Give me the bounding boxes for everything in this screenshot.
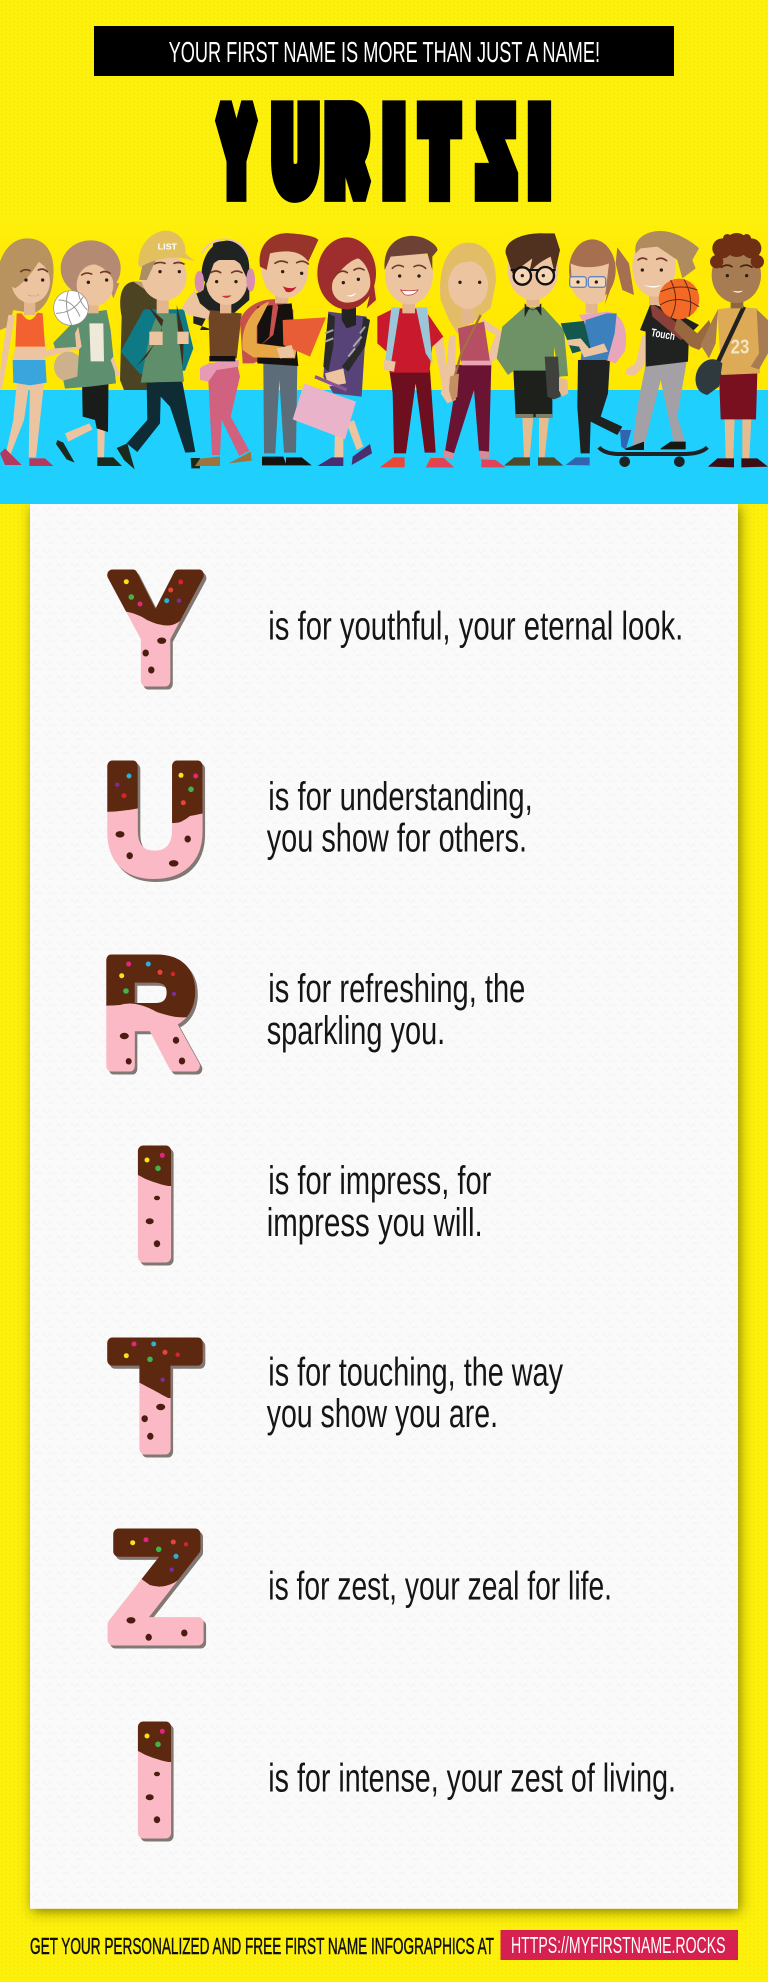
text: T lines: is for touching, the way bbox=[268, 1351, 563, 1395]
letter T icon: T bbox=[111, 1310, 199, 1482]
title: name: Z bbox=[480, 91, 513, 213]
student 11: boy on skateboard with basketball: Touch bbox=[650, 327, 676, 343]
letter R icon: R bbox=[102, 928, 198, 1099]
row: letter U bbox=[107, 760, 530, 882]
text: T lines bbox=[267, 1351, 563, 1436]
letter T icon: T bbox=[111, 1310, 199, 1482]
student 9: boy in glasses with green sweater bbox=[497, 233, 568, 466]
student 10: girl with tablet and pink backpack bbox=[561, 239, 634, 465]
letter Z icon bbox=[108, 1528, 206, 1648]
letter I icon: I bbox=[136, 1697, 178, 1869]
letter I icon: I bbox=[133, 1694, 176, 1866]
letter I icon bbox=[138, 1722, 174, 1842]
student 1: girl in orange top bbox=[0, 238, 79, 466]
student 5: boy reading book bbox=[240, 233, 326, 465]
icon: basketball bbox=[659, 279, 699, 319]
title: name: T bbox=[423, 91, 456, 213]
student 3: boy with cap and backpack bbox=[117, 231, 200, 469]
student 7: boy in red shirt bbox=[377, 236, 454, 467]
row: letter I bbox=[138, 1146, 491, 1266]
text: U lines: you show for others. bbox=[267, 817, 527, 861]
main white panel bbox=[30, 504, 738, 1909]
title: name bbox=[219, 89, 548, 213]
title: name: I bbox=[386, 89, 402, 212]
letter I icon: I bbox=[133, 1118, 176, 1290]
title: name: Y bbox=[219, 91, 254, 213]
student 11: boy on skateboard with basketball bbox=[599, 231, 714, 467]
student 12: boy in basketball jersey bbox=[696, 233, 768, 467]
letter Z icon: Z bbox=[108, 1501, 203, 1673]
header banner bbox=[94, 26, 674, 76]
scene: yellow wall and blue floor bbox=[0, 215, 768, 504]
letter Y icon: Y bbox=[112, 545, 204, 717]
letter U icon: U bbox=[104, 734, 206, 905]
student 12: boy in basketball jersey: 23 bbox=[731, 335, 749, 358]
letter U icon bbox=[107, 760, 206, 882]
student 8: blonde girl bbox=[426, 243, 507, 467]
student 2: girl in green jacket with volleyball bbox=[53, 240, 122, 466]
title: name: I bbox=[531, 89, 548, 212]
letter Z icon: Z bbox=[108, 1501, 203, 1673]
letter R icon bbox=[106, 954, 202, 1074]
letter T icon: T bbox=[113, 1313, 202, 1485]
student 6: girl with pink bag bbox=[293, 237, 376, 466]
letter Z icon: Z bbox=[111, 1504, 205, 1676]
letter T icon bbox=[107, 1338, 206, 1458]
text: R lines: sparkling you. bbox=[267, 1009, 445, 1053]
text: U lines bbox=[267, 775, 533, 861]
text: R lines bbox=[267, 967, 525, 1053]
row: letter Z bbox=[108, 1501, 612, 1676]
letter I icon bbox=[138, 1146, 174, 1266]
student 3: boy with cap and backpack: LIST bbox=[158, 241, 178, 251]
row: letter T bbox=[107, 1338, 563, 1458]
row: letter I (second) bbox=[138, 1722, 674, 1842]
title: name: R bbox=[327, 91, 367, 213]
text: I lines: is for impress, for bbox=[268, 1159, 491, 1203]
letter U icon: U bbox=[106, 737, 209, 908]
text: T lines: you show you are. bbox=[267, 1392, 498, 1436]
icon: volleyball bbox=[54, 291, 88, 325]
letter U icon: U bbox=[104, 734, 206, 905]
text: R lines: is for refreshing, the bbox=[268, 967, 525, 1011]
row: letter R bbox=[106, 954, 524, 1074]
letter I icon: I bbox=[133, 1694, 176, 1866]
illustration: group of students, right half bbox=[377, 231, 768, 467]
letter Y icon: Y bbox=[110, 542, 201, 714]
letter R icon: R bbox=[105, 931, 200, 1102]
letter Y icon bbox=[107, 570, 206, 690]
title: name: U bbox=[275, 91, 316, 212]
student 4: girl with headphones bbox=[182, 239, 255, 466]
icon: skateboard bbox=[599, 447, 707, 467]
row: letter Y bbox=[110, 542, 683, 717]
letter I icon: I bbox=[136, 1121, 178, 1293]
letter Y icon: Y bbox=[110, 542, 201, 714]
text: I lines bbox=[267, 1159, 491, 1245]
illustration: group of students, left half bbox=[0, 231, 376, 469]
letter I icon: I bbox=[133, 1118, 176, 1290]
text: U lines: is for understanding, bbox=[268, 775, 533, 819]
text: Z line: is for zest, your zeal for life. bbox=[268, 1564, 612, 1608]
text: I lines: impress you will. bbox=[267, 1201, 483, 1245]
letter R icon: R bbox=[102, 928, 198, 1099]
